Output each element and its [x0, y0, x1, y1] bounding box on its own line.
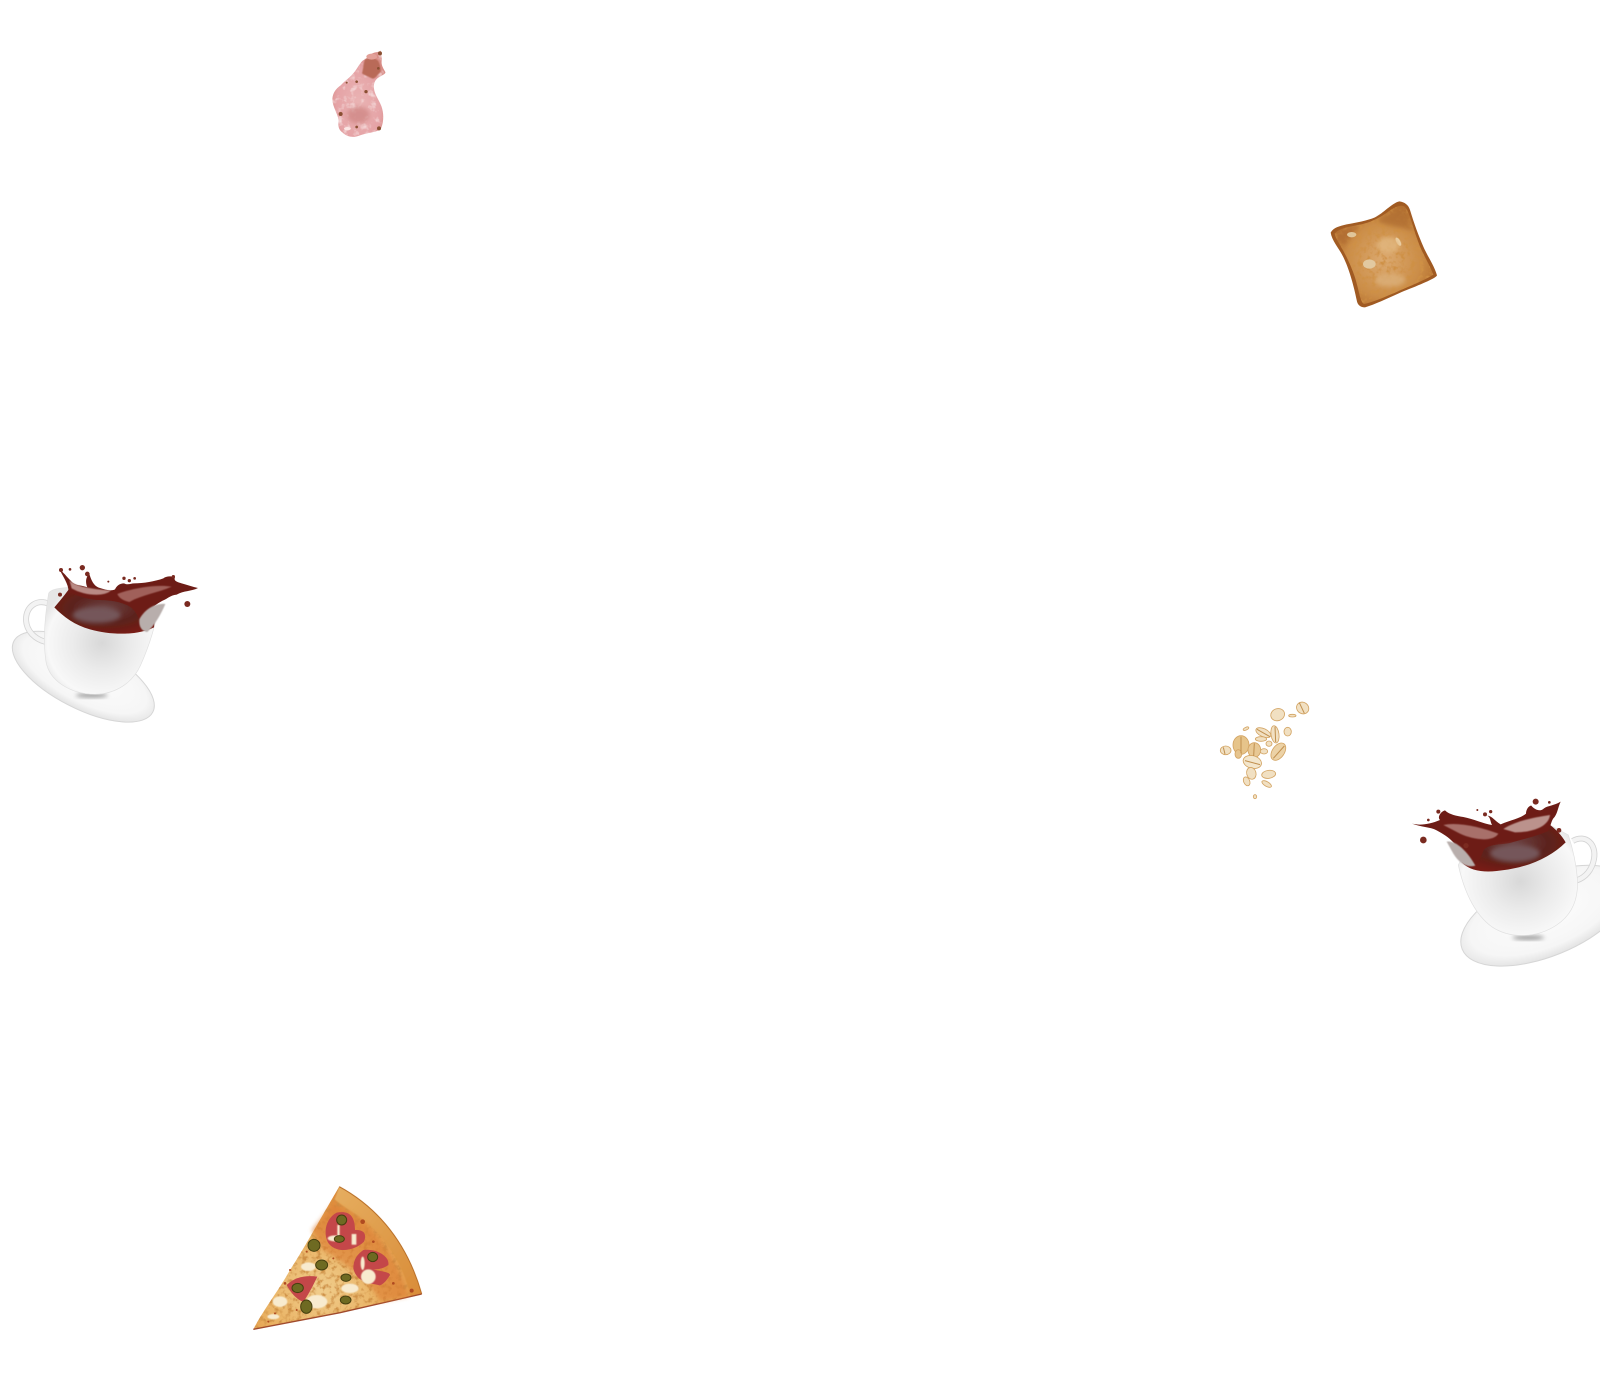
coffee surface: [54, 590, 155, 634]
saucer: [0, 613, 167, 741]
icon: coffee cup splash left: [0, 565, 198, 741]
cup body: [1458, 823, 1578, 935]
oat ridges: [1223, 703, 1304, 765]
icon: toast slice: [1331, 201, 1437, 307]
coffee splash: [1412, 802, 1561, 868]
saucer: [1447, 844, 1600, 987]
icon: coffee cup splash right: [1412, 799, 1600, 987]
pizza salami: [287, 1212, 390, 1302]
cup shadow: [76, 693, 108, 698]
coffee surface: [1462, 822, 1566, 871]
icon: oat flakes: [1220, 700, 1311, 799]
cup shadow: [1512, 935, 1544, 940]
cup body: [44, 587, 155, 694]
icon: pizza slice: [253, 1187, 422, 1329]
cup handle: [26, 602, 49, 642]
pizza crust: [335, 1187, 422, 1297]
pizza jalapenos: [292, 1215, 378, 1313]
coffee splash: [59, 569, 198, 622]
pizza burnt specks: [267, 1219, 414, 1323]
pizza cheese: [267, 1225, 376, 1319]
icon: ham slice: [332, 51, 385, 137]
cup handle: [1573, 839, 1594, 880]
